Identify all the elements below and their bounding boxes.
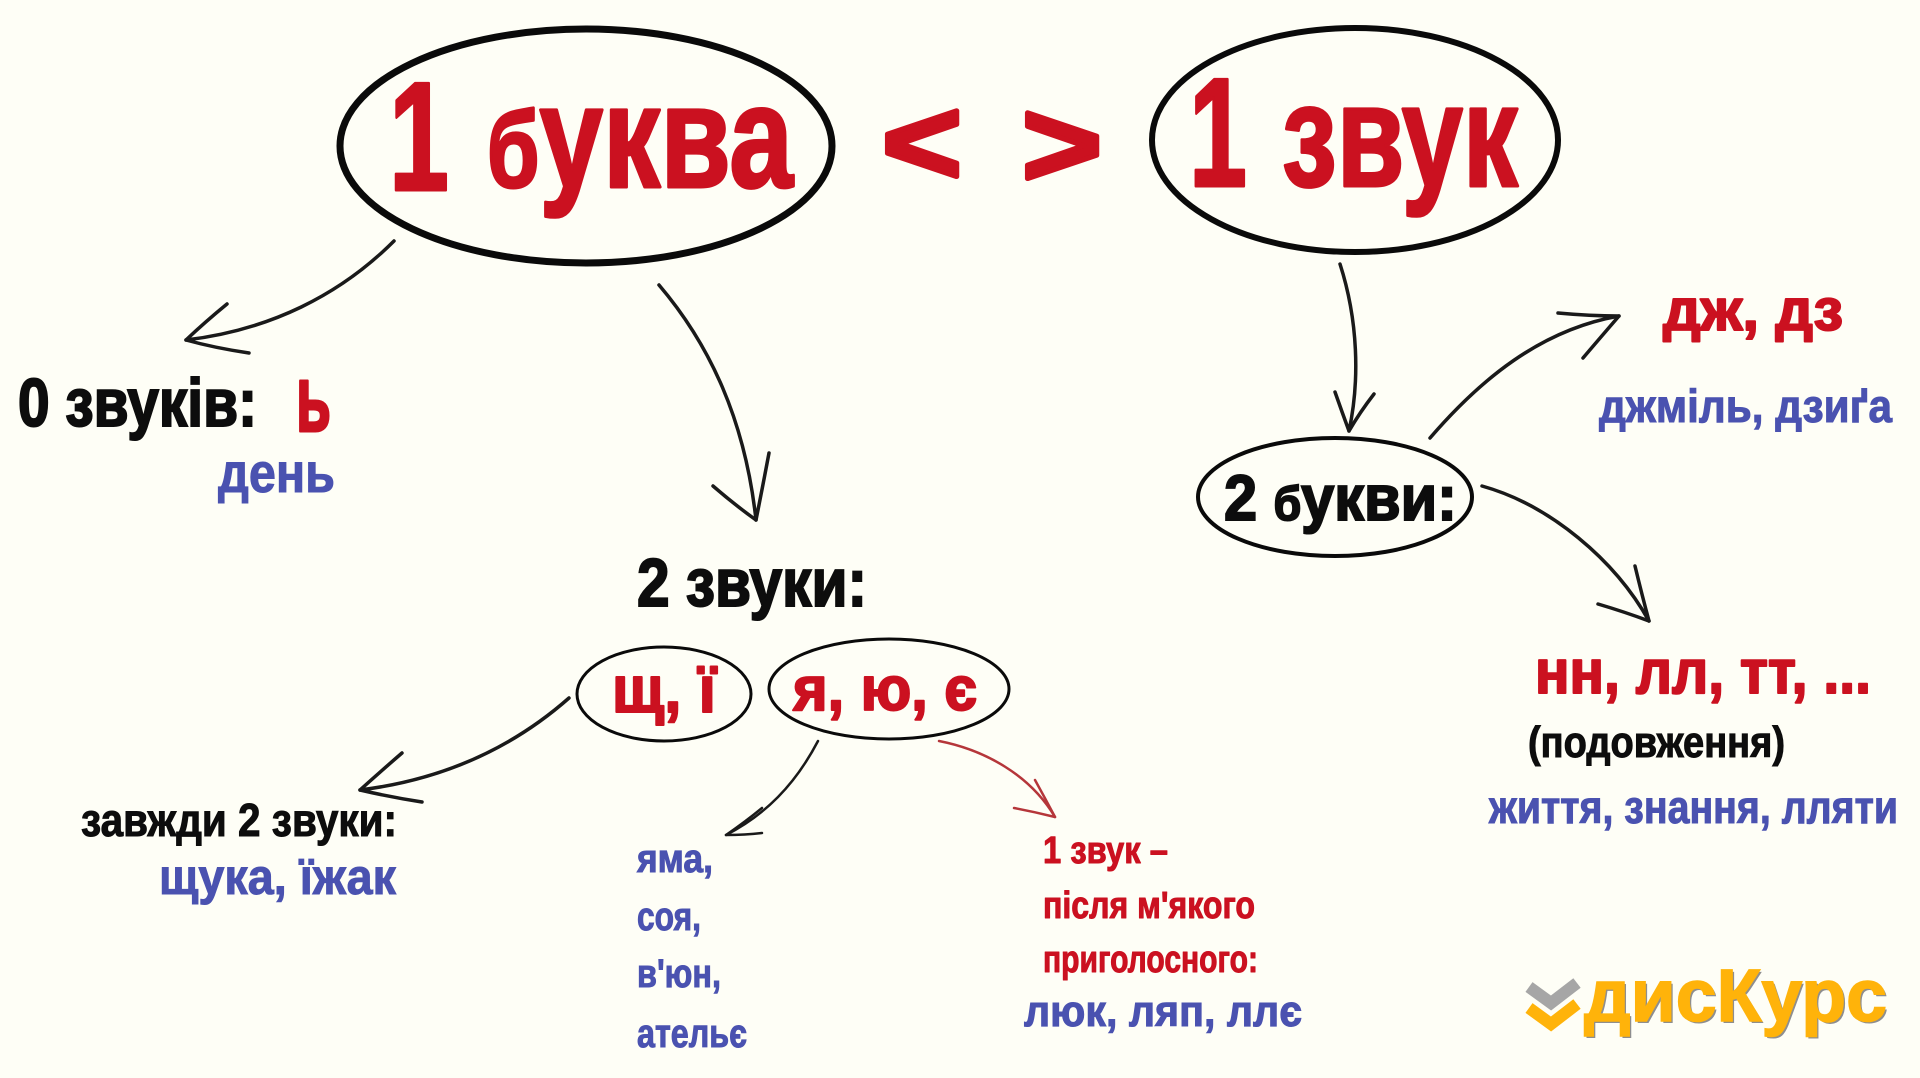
arrow: я, ю, є to examples <box>726 741 818 835</box>
heading: 1 звук in oval: звук <box>1282 54 1519 217</box>
heading: 1 буква in oval <box>340 29 832 263</box>
example: день: день <box>218 441 335 504</box>
examples list: яма, соя, в'юн, ательє: ательє <box>637 1012 747 1056</box>
text: 2 звуки: 2 звуки: <box>637 545 867 621</box>
logo: дисКурс: дисКурс <box>1586 956 1889 1039</box>
note: 1 звук після м'якого приголосного: 1 звук – <box>1043 830 1168 872</box>
examples list: яма, соя, в'юн, ательє <box>636 837 747 1056</box>
oval: 2 букви: 2 букви: <box>1224 462 1457 534</box>
heading: 1 буква in oval: буква <box>487 55 794 218</box>
heading: 1 буква in oval: 1 <box>389 50 449 223</box>
arrow: щ, ї to завжди 2 звуки <box>360 698 569 802</box>
heading: 1 звук in oval <box>1152 28 1558 252</box>
examples list: яма, соя, в'юн, ательє: яма, <box>636 837 713 881</box>
less-than sign: < <box>882 74 962 210</box>
example: джміль, дзиґа: джміль, дзиґа <box>1599 380 1892 432</box>
oval: 2 букви <box>1198 438 1472 556</box>
oval: щ, ї <box>577 647 751 741</box>
note: 1 звук після м'якого приголосного: після м'якого <box>1043 885 1255 927</box>
icon: logo chevrons <box>1529 983 1577 1024</box>
greater-than sign: > <box>1022 76 1102 212</box>
arrow: 2 букви to дж, дз <box>1430 313 1619 438</box>
letters: дж, дз: дж, дз <box>1663 278 1843 343</box>
text: 0 звуків: 0 звуків: <box>18 365 257 441</box>
examples list: яма, соя, в'юн, ательє: в'юн, <box>637 952 721 996</box>
letter: soft sign: ь <box>296 346 331 452</box>
arrow: я, ю, є to 1 звук <box>939 741 1055 817</box>
note: подовження: (подовження) <box>1528 718 1785 767</box>
heading: 1 звук in oval: 1 <box>1189 46 1247 219</box>
arrow: 1 звук to 2 букви <box>1335 264 1374 431</box>
arrow: 1 буква to 0 звуків <box>186 241 394 353</box>
example: люк, ляп, ллє: люк, ляп, ллє <box>1024 987 1302 1036</box>
text: завжди 2 звуки: завжди 2 звуки: <box>81 794 397 846</box>
note: 1 звук після м'якого приголосного: приголосного: <box>1043 939 1258 981</box>
arrow: 1 буква to 2 звуки <box>659 285 769 520</box>
logo: дисКурс: дисКурс <box>1584 954 1887 1037</box>
letters: нн, лл, тт: нн, лл, тт, ... <box>1535 638 1871 707</box>
arrow: 2 букви to нн, лл, тт <box>1482 486 1649 621</box>
note: 1 звук після м'якого приголосного <box>1043 830 1258 981</box>
examples list: яма, соя, в'юн, ательє: соя, <box>637 895 701 939</box>
example: щука, їжак: щука, їжак <box>159 849 397 905</box>
oval: щ, ї: щ, ї <box>612 652 717 726</box>
oval: я, ю, є <box>769 639 1009 739</box>
oval: я, ю, є: я, ю, є <box>792 655 977 724</box>
